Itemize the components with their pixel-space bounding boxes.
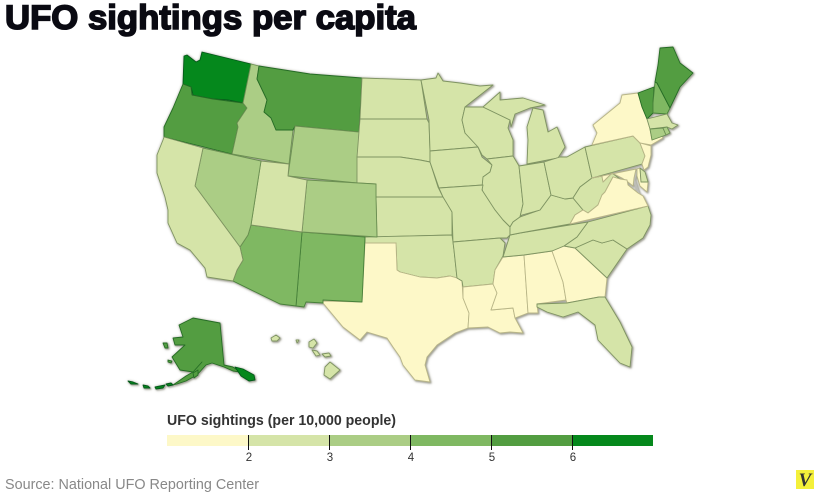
title: UFO sightings per capita	[5, 0, 417, 37]
state: Oklahoma	[365, 235, 457, 278]
state: Indiana	[519, 162, 551, 217]
state: Florida	[537, 297, 632, 367]
state: Montana	[257, 66, 362, 132]
state: Maine	[655, 47, 693, 108]
state: Minnesota	[421, 73, 493, 151]
state: New Mexico	[296, 232, 365, 307]
state: New Hampshire	[653, 82, 670, 114]
legend tick labels: 2	[246, 452, 252, 464]
state: Missouri	[439, 185, 510, 242]
source note: Source: National UFO Reporting Center	[5, 477, 259, 493]
state: West Virginia	[573, 173, 620, 213]
legend	[167, 413, 653, 464]
legend tick labels: 6	[570, 452, 576, 464]
legend colour scale	[167, 435, 653, 450]
state: North Dakota	[360, 78, 427, 119]
state: New York	[592, 93, 663, 145]
state: Washington	[183, 52, 251, 103]
state: Massachusetts	[647, 114, 678, 129]
state: Arkansas	[453, 238, 505, 287]
state: Kansas	[376, 197, 452, 237]
logo: Vox V: V	[799, 470, 813, 491]
state: Wisconsin	[462, 107, 513, 159]
state: Oregon	[164, 84, 247, 154]
state: Wyoming	[288, 126, 359, 183]
state: Maryland west	[592, 169, 636, 186]
state: Maryland east	[637, 168, 648, 192]
Chesapeake Bay	[634, 171, 643, 204]
state: Tennessee	[503, 222, 588, 257]
legend tick labels: 4	[408, 452, 415, 464]
state: Texas	[323, 243, 469, 382]
state: Delaware	[640, 168, 648, 182]
Aleutian islands	[128, 381, 138, 384]
state: Nevada	[195, 148, 261, 247]
state: Nebraska	[357, 157, 443, 197]
state: Connecticut	[650, 128, 666, 140]
legend title: UFO sightings (per 10,000 people)	[167, 413, 396, 429]
state: Arizona	[233, 225, 302, 306]
state: Ohio	[544, 147, 592, 199]
state: Idaho	[232, 64, 293, 164]
state: South Carolina	[575, 240, 627, 278]
state: Vermont	[638, 87, 654, 119]
choropleth map of US states	[128, 47, 693, 389]
state: Michigan lower peninsula	[527, 108, 565, 164]
state: Mississippi	[491, 255, 528, 318]
state: Virginia	[570, 177, 648, 224]
state: Alabama	[524, 251, 566, 313]
state: South Dakota	[357, 119, 430, 162]
legend tick labels: 3	[327, 452, 333, 464]
Alaska panhandle islands	[235, 367, 255, 381]
Hawaii	[271, 335, 340, 379]
state: New Jersey	[640, 143, 651, 170]
state: Illinois	[482, 156, 523, 227]
state: Alaska	[128, 318, 255, 389]
state: Utah	[251, 161, 307, 232]
state: California	[157, 137, 243, 281]
state: Iowa	[430, 147, 492, 188]
state: Georgia	[552, 246, 607, 303]
state: North Carolina	[564, 206, 651, 249]
state: Colorado	[302, 180, 377, 237]
legend tick labels	[246, 452, 576, 464]
state: Louisiana	[463, 284, 523, 333]
legend tick labels: 5	[489, 452, 495, 464]
state: Michigan upper peninsula	[483, 92, 545, 127]
state: Pennsylvania	[585, 136, 645, 178]
state: Kentucky	[510, 195, 583, 235]
state: Rhode Island	[663, 127, 670, 135]
